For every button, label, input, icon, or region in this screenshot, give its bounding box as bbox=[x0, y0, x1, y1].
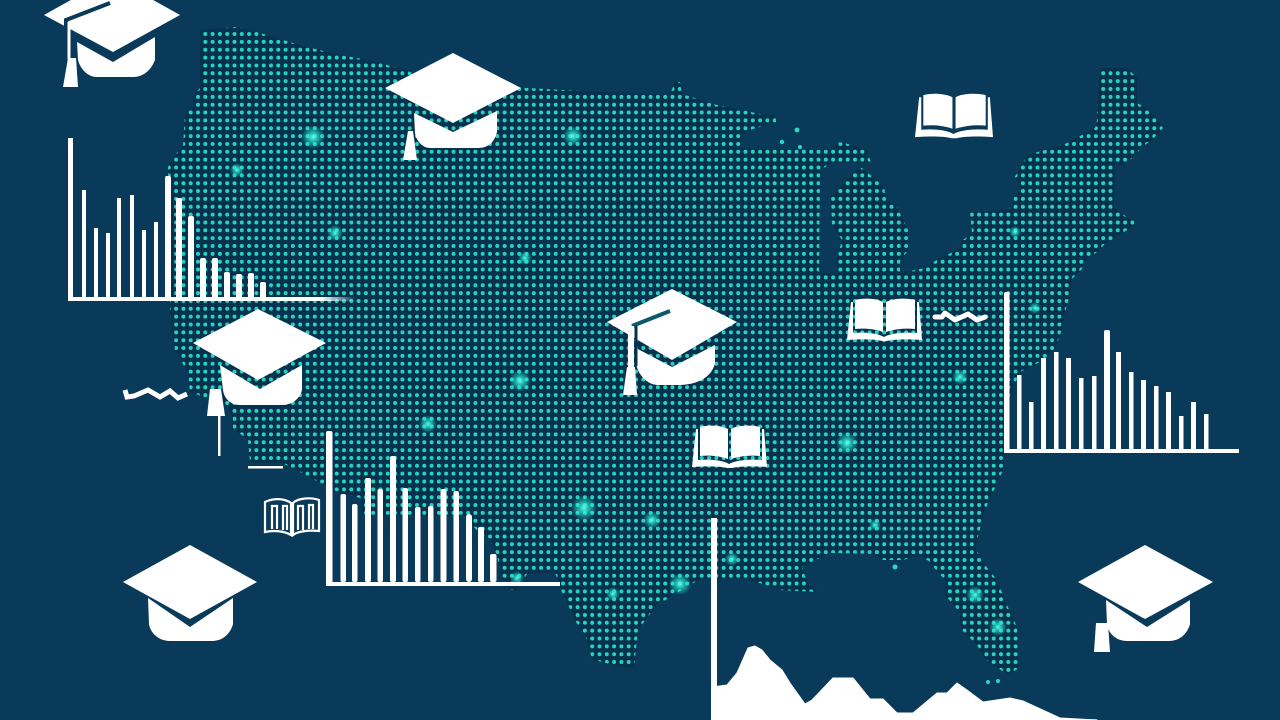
dotted map of the United States bbox=[168, 27, 1163, 684]
graduation cap: bottom right bbox=[1078, 545, 1213, 652]
bar chart: right bbox=[1004, 292, 1239, 453]
icon: open book top right bbox=[915, 94, 993, 138]
area chart: bottom bbox=[711, 518, 1097, 720]
bar chart: bottom centre bbox=[326, 431, 560, 586]
small axis stub bbox=[248, 466, 283, 468]
graduation cap: top left bbox=[44, 0, 180, 87]
graduation cap: centre bbox=[607, 289, 737, 395]
icon: small open book left bbox=[265, 498, 319, 535]
graduation cap: bottom left bbox=[123, 545, 257, 641]
bar chart: left bbox=[68, 138, 356, 301]
icon: open book centre right bbox=[847, 299, 922, 341]
icon: open book centre bbox=[692, 426, 767, 468]
squiggle: left bbox=[125, 390, 187, 398]
graduation cap: top centre bbox=[385, 53, 521, 160]
graduation cap: left bbox=[193, 309, 326, 456]
squiggle: right bbox=[935, 313, 985, 320]
